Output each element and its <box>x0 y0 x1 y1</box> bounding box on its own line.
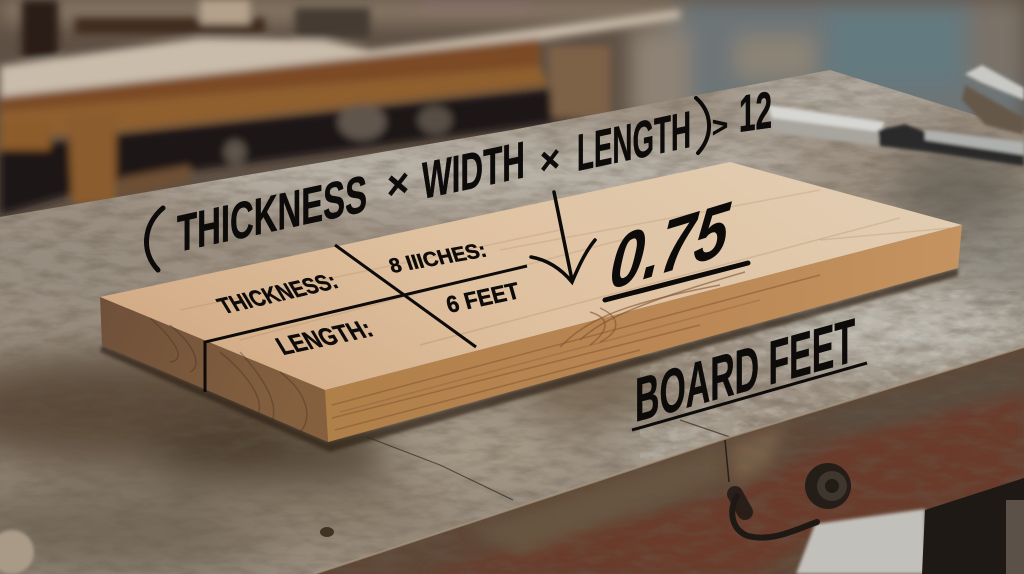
formula text <box>147 82 772 270</box>
board shadow <box>100 268 958 452</box>
opening bracket <box>147 208 163 270</box>
result underline <box>605 263 748 300</box>
icon: drawer bolt <box>805 463 851 509</box>
multiply sign: × <box>540 137 560 184</box>
result value: 0.75 <box>606 185 734 307</box>
icon: drawer latch handle <box>732 494 817 538</box>
blurred workshop background <box>0 0 1024 240</box>
board label: length: LENGTH: <box>271 315 378 360</box>
board top face <box>100 162 962 390</box>
formula word: width: WIDTH <box>422 131 525 211</box>
formula word: thickness: THICKNESS <box>177 164 367 264</box>
workbench front apron <box>300 340 1024 574</box>
crack lines <box>367 420 730 500</box>
board label: thickness: THICKNESS: <box>213 269 343 319</box>
wood grain lines <box>150 190 950 432</box>
icon: stain mark <box>320 527 334 537</box>
closing bracket <box>696 98 709 153</box>
board feet underline <box>632 363 867 430</box>
board label: 8 inches: 8 IIICHES: <box>386 239 490 278</box>
bench leg and floor <box>796 478 1024 574</box>
multiply sign: × <box>387 159 409 209</box>
number twelve: 12 <box>739 82 772 144</box>
board front face <box>325 225 962 442</box>
board end grain <box>100 297 328 442</box>
knob at bottom left <box>0 530 34 574</box>
board grid lines <box>205 245 527 392</box>
wooden board <box>100 162 962 442</box>
formula word: length: LENGTH <box>577 100 691 183</box>
greater than sign: > <box>712 108 728 143</box>
board label: 6 feet: 6 FEET <box>443 278 523 319</box>
knife on the bench <box>768 65 1024 166</box>
arrow pointing to result <box>531 192 595 282</box>
